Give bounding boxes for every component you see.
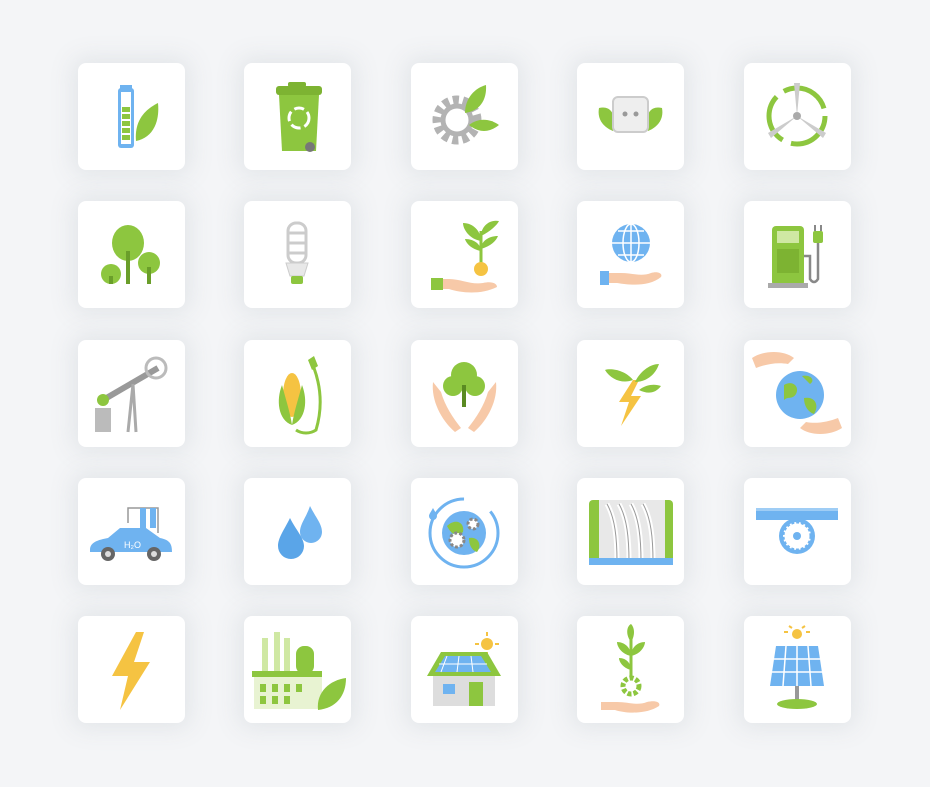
icon: turbine pipe (756, 508, 838, 554)
card: globe hand (577, 201, 684, 308)
card: lightning (78, 616, 185, 723)
card: bolt leaves (577, 340, 684, 447)
icon: hydro dam (589, 500, 673, 565)
icon: house solar (427, 632, 501, 706)
card: gear leaves (411, 63, 518, 170)
card: earth cycle gears (411, 478, 518, 585)
icon: hand plant coin (431, 221, 499, 292)
card: wind turbine (744, 63, 851, 170)
card: socket leaves (577, 63, 684, 170)
icon: h2 car: H₂O (124, 540, 141, 550)
card: money plant (411, 201, 518, 308)
icon: bolt (112, 632, 150, 710)
card: plant hand gear (577, 616, 684, 723)
icon: tree in hands (433, 362, 496, 432)
card: dam (577, 478, 684, 585)
card: oil pump (78, 340, 185, 447)
icon: gear (437, 85, 499, 140)
card: bulb (244, 201, 351, 308)
card: water turbine (744, 478, 851, 585)
icon: sprout gear hand (601, 624, 659, 713)
icon: socket (599, 97, 662, 132)
card: battery leaf (78, 63, 185, 170)
icon: globe hand (600, 224, 661, 285)
icon: pumpjack (95, 358, 166, 432)
icon: solar panel (770, 626, 824, 709)
icon: cfl bulb (286, 223, 308, 284)
card: green factory (244, 616, 351, 723)
icon: drops (278, 506, 322, 559)
icon: bin (276, 82, 322, 152)
icon: factory (252, 632, 346, 710)
icon: earth gears cycle (429, 499, 498, 567)
card: hands tree (411, 340, 518, 447)
icon: turbine (768, 83, 826, 144)
icon: corn pump (279, 356, 320, 433)
icon: battery (118, 85, 158, 148)
card: hydrogen car (78, 478, 185, 585)
icon: earth in hands (752, 352, 842, 434)
icon: bolt leaves (605, 364, 661, 426)
card: earth hands (744, 340, 851, 447)
card: recycle bin (244, 63, 351, 170)
card: trees (78, 201, 185, 308)
card: solar panel (744, 616, 851, 723)
icon: trees (101, 225, 160, 284)
card: ev charger (744, 201, 851, 308)
card: water drops (244, 478, 351, 585)
icon: charger (768, 225, 823, 288)
card: solar house (411, 616, 518, 723)
card: biofuel corn (244, 340, 351, 447)
